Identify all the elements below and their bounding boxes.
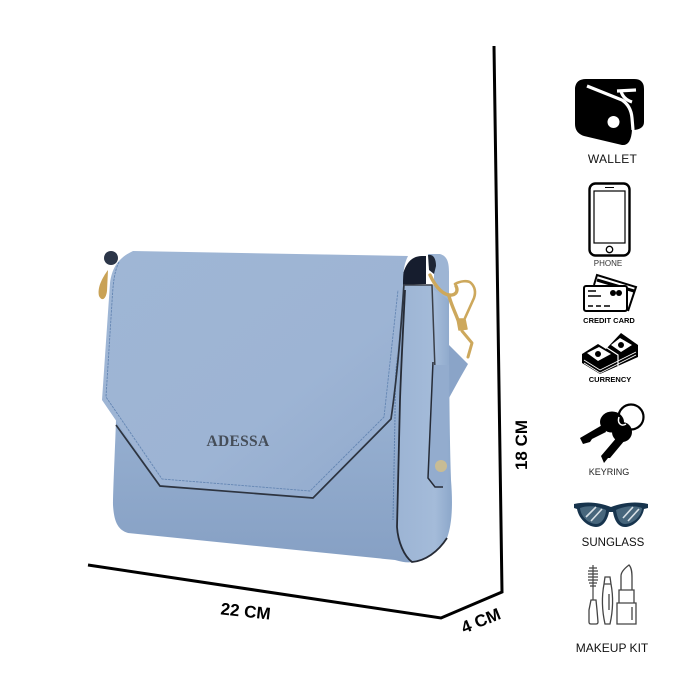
icon: phone: [590, 184, 630, 256]
gold clasp: [430, 275, 475, 357]
label: wallet: WALLET: [588, 152, 638, 166]
label: credit card: CREDIT CARD: [583, 316, 635, 325]
icon: sunglasses: [574, 503, 648, 527]
label: 18 CM: 18 CM: [512, 420, 531, 470]
flap stitching: [106, 262, 398, 491]
strap tab edge: [428, 362, 443, 487]
strap tab: [428, 365, 449, 487]
icon: keys: [580, 404, 644, 463]
dimension lines: [88, 46, 502, 618]
bag side panel: [396, 285, 452, 562]
label: keyring: KEYRING: [589, 467, 629, 477]
label: makeup kit: MAKEUP KIT: [576, 641, 649, 655]
icon: currency: [582, 333, 638, 374]
brand logo: ADESSA: [207, 433, 270, 450]
flap dark edge: [116, 284, 404, 498]
icon: wallet: [575, 79, 644, 145]
label: phone: PHONE: [594, 259, 622, 268]
left strap ring: [99, 251, 118, 299]
handbag photo: [99, 251, 475, 562]
icon: credit card: [584, 275, 636, 311]
label: 22 CM: 22 CM: [220, 599, 271, 624]
body stitching: [393, 300, 399, 520]
label: sunglass: SUNGLASS: [582, 537, 645, 549]
icon: makeup kit: [588, 565, 636, 624]
top right side flap edge: [428, 254, 449, 300]
tab stud: [435, 460, 447, 472]
flap: [102, 251, 408, 498]
bag front body: [113, 285, 412, 562]
label: currency: CURRENCY: [589, 375, 631, 384]
body side seam: [397, 290, 447, 562]
bag inner opening: [401, 256, 426, 285]
side panel dark line: [404, 285, 435, 370]
strap loop: [449, 345, 468, 398]
label: 4 CM: 4 CM: [459, 604, 503, 637]
